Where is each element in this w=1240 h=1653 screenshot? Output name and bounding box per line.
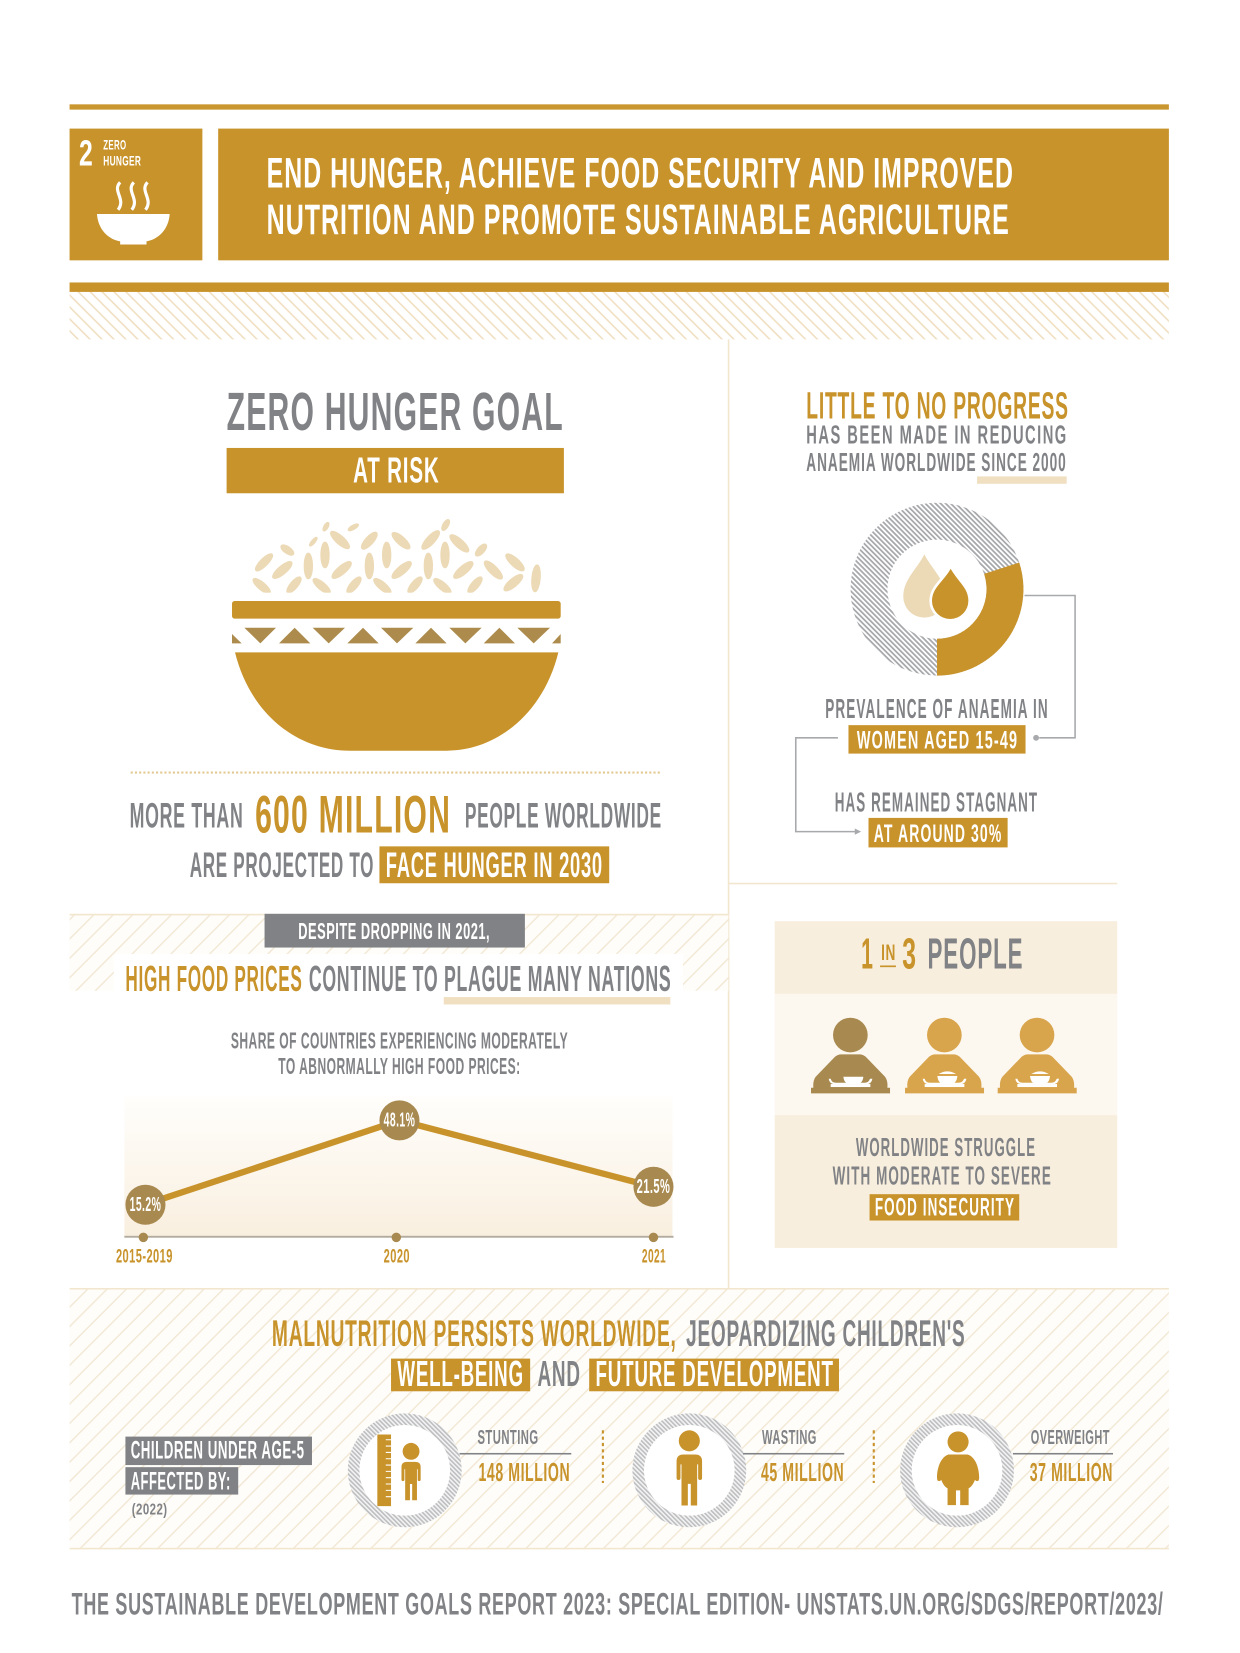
label: women aged 15-49 — [848, 725, 1026, 754]
data point: 15.2% — [125, 1185, 165, 1225]
panel: malnutrition — [70, 1288, 1169, 1549]
callout: 600 million: FACE HUNGER IN 2030 — [386, 847, 603, 885]
donut chart: anaemia prevalence — [869, 521, 1023, 676]
label: children under age 5: AFFECTED BY: — [131, 1467, 231, 1495]
heading: 1 in 3 people: IN — [881, 940, 896, 965]
heading: malnutrition persists: JEOPARDIZING CHILDREN'S — [686, 1313, 965, 1354]
text: PEOPLE WORLDWIDE — [465, 797, 662, 835]
label: children under age 5 — [125, 1437, 312, 1519]
goal badge — [70, 129, 202, 260]
connector: women to stagnant — [796, 738, 861, 835]
heading: 1 in 3 people — [861, 931, 1023, 979]
callout: 600 million — [130, 786, 662, 885]
data point: 48.1% — [379, 1100, 419, 1140]
heading: high food prices: HIGH FOOD PRICES — [125, 959, 302, 999]
panel: zero hunger goal — [130, 382, 662, 885]
stat: wasting: 45 MILLION — [761, 1457, 844, 1487]
banner: despite dropping: DESPITE DROPPING IN 2021, — [298, 918, 490, 944]
icon row: three people eating — [811, 1018, 1077, 1093]
line chart: food prices: 2020 — [384, 1247, 410, 1268]
at risk banner: AT RISK — [353, 451, 440, 491]
icon: overweight child — [906, 1419, 1008, 1521]
heading: high food prices — [125, 959, 671, 1004]
icon: blood drops — [903, 554, 970, 620]
data point: 15.2%: 15.2% — [130, 1194, 161, 1216]
label: children under age 5: (2022) — [132, 1502, 168, 1519]
connector: donut to women aged 15-49 — [1024, 596, 1075, 741]
label: children under age 5: CHILDREN UNDER AGE-5 — [131, 1437, 305, 1465]
banner: despite dropping — [265, 914, 525, 948]
title banner — [218, 129, 1169, 260]
stat: wasting — [638, 1419, 844, 1521]
stat: stunting — [354, 1419, 571, 1521]
header band — [70, 104, 1169, 339]
text: food insecurity: WORLDWIDE STRUGGLE — [856, 1132, 1036, 1162]
heading: malnutrition persists: WELL-BEING — [397, 1354, 524, 1394]
stat: stunting: STUNTING — [477, 1427, 539, 1449]
stat: wasting: WASTING — [762, 1427, 817, 1449]
label: at around 30% — [868, 818, 1008, 848]
data point: 48.1%: 48.1% — [384, 1110, 415, 1132]
goal badge: HUNGER — [103, 153, 141, 168]
heading: 1 in 3 people: 1 — [861, 931, 874, 979]
callout: 600 million: 600 MILLION — [255, 786, 451, 845]
callout: 600 million: ARE PROJECTED TO — [190, 847, 374, 885]
label: women aged 15-49: WOMEN AGED 15-49 — [857, 726, 1018, 754]
goal badge: ZERO — [103, 138, 126, 153]
icon: person with empty bowl — [811, 1018, 890, 1093]
label: at around 30%: AT AROUND 30% — [874, 820, 1002, 848]
stat: overweight — [906, 1419, 1113, 1521]
chart caption — [231, 1028, 568, 1079]
heading: little to no progress — [806, 385, 1069, 484]
stat: stunting: 148 MILLION — [479, 1457, 570, 1487]
heading: 1 in 3 people: 3 — [902, 931, 917, 979]
goal badge: 2 — [79, 133, 94, 173]
heading: malnutrition persists — [272, 1313, 965, 1394]
panel: high food prices — [70, 914, 728, 1268]
heading: 1 in 3 people: PEOPLE — [928, 931, 1023, 979]
panel: 1 in 3 people — [775, 921, 1117, 1248]
heading: malnutrition persists: FUTURE DEVELOPMENT — [596, 1354, 834, 1394]
icon: person with full bowl — [905, 1018, 984, 1093]
panel: anaemia: HAS REMAINED STAGNANT — [835, 787, 1038, 818]
panel: anaemia — [796, 385, 1075, 848]
icon: rice bowl — [232, 518, 561, 751]
heading: malnutrition persists: MALNUTRITION PERSISTS WORLDWIDE, — [272, 1313, 677, 1354]
line chart: food prices: 2015-2019 — [116, 1247, 173, 1268]
panel: high food prices: CONTINUE TO PLAGUE MANY NATIONS — [309, 959, 671, 999]
icon: stunted child — [354, 1419, 456, 1521]
line chart: food prices — [116, 1096, 674, 1268]
at risk banner — [227, 448, 564, 493]
heading: zero hunger goal: ZERO HUNGER GOAL — [227, 382, 564, 442]
text: food insecurity — [833, 1132, 1052, 1221]
chart caption: SHARE OF COUNTRIES EXPERIENCING MODERATELY — [231, 1028, 568, 1054]
icon: person with full bowl — [998, 1018, 1077, 1093]
data point: 21.5%: 21.5% — [637, 1176, 670, 1198]
text: food insecurity: FOOD INSECURITY — [875, 1193, 1015, 1221]
heading: malnutrition persists: AND — [538, 1354, 581, 1394]
callout: 600 million: MORE THAN — [130, 797, 243, 835]
line chart: food prices: 2021 — [642, 1247, 666, 1268]
chart caption: TO ABNORMALLY HIGH FOOD PRICES: — [278, 1053, 521, 1079]
stat: overweight: OVERWEIGHT — [1031, 1427, 1110, 1449]
data point: 21.5% — [633, 1167, 674, 1207]
icon: wasted child — [638, 1419, 740, 1521]
stat: overweight: 37 MILLION — [1030, 1457, 1113, 1487]
